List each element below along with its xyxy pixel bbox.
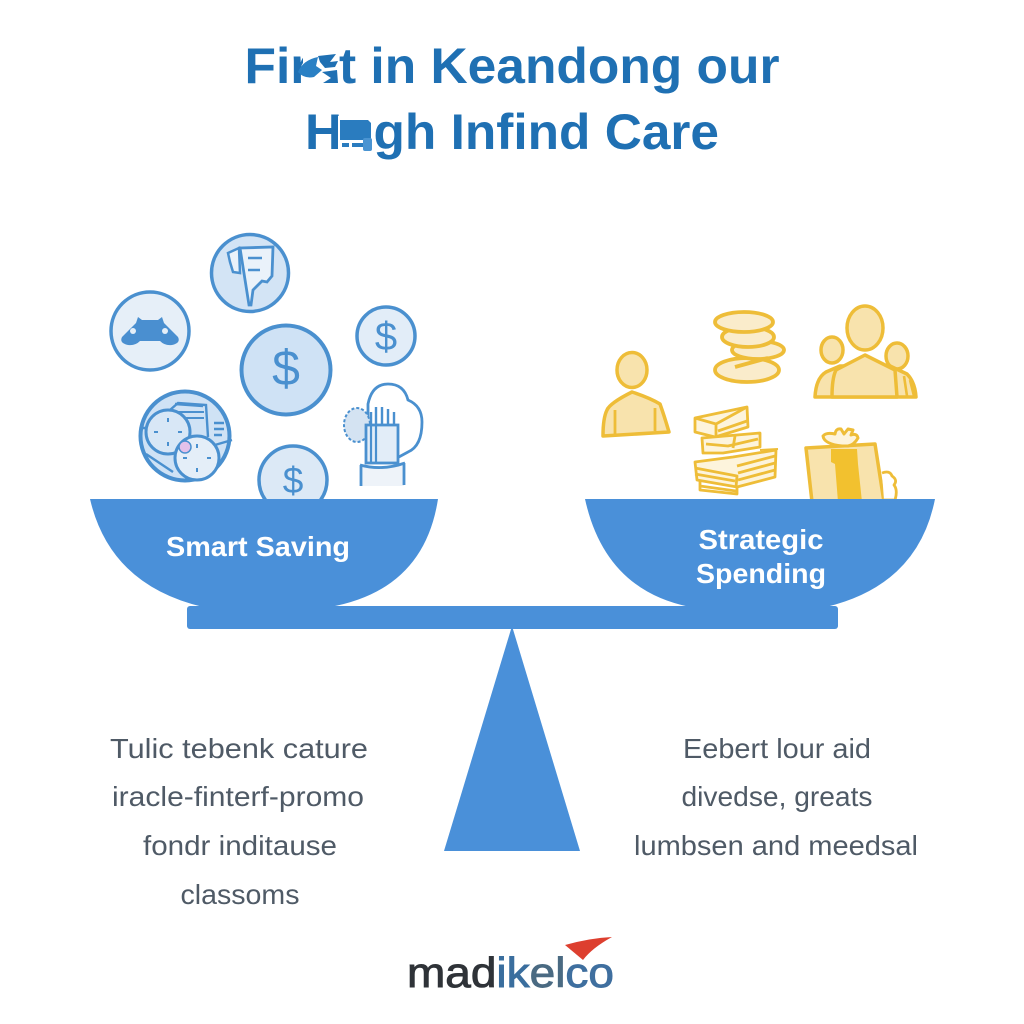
icon: bottom dollar coin <box>257 444 329 499</box>
text block: right description <box>634 733 918 861</box>
icon: car <box>111 292 189 370</box>
bowl label: smart saving: Smart Saving <box>166 531 350 562</box>
text block: left description: iracle-finterf-promo <box>112 781 364 812</box>
text block: left description: Tulic tebenk cature <box>110 733 368 764</box>
balance beam <box>187 606 838 629</box>
icon: document <box>212 234 288 312</box>
icon: single person <box>603 352 669 436</box>
icon: stacked books of money <box>695 407 778 494</box>
panel: strategic spending icons <box>603 306 916 502</box>
icon: gift box <box>806 429 896 502</box>
icon: large dollar coin <box>242 326 330 414</box>
icon: small dollar coin <box>357 307 415 365</box>
bowl label: strategic spending: Spending <box>696 558 826 589</box>
icon: group of people <box>815 306 916 397</box>
title <box>244 38 780 160</box>
text block: left description: classoms <box>180 879 300 910</box>
logo mark: red swoosh <box>565 937 612 960</box>
text block: right description: Eebert lour aid <box>683 733 871 764</box>
text block: right description: lumbsen and meedsal <box>634 830 918 861</box>
title icon: smudge second line <box>338 116 372 151</box>
panel: smart saving icons <box>111 234 422 514</box>
icon: large dollar coin: $ <box>272 340 300 396</box>
title icon: smudge first line <box>298 50 339 86</box>
title: First in Keandong our <box>244 38 780 94</box>
icon: small dollar coin: $ <box>375 315 397 359</box>
bowl label: strategic spending <box>696 524 826 589</box>
bowl label: strategic spending: Strategic <box>698 524 824 555</box>
text block: left description <box>110 733 368 910</box>
title: Hngh Infind Care <box>305 104 719 160</box>
right bowl <box>585 499 935 607</box>
icon: clocks <box>140 392 232 480</box>
balance fulcrum <box>444 626 580 851</box>
logo: madikelco <box>407 949 614 996</box>
left bowl <box>90 499 438 607</box>
text block: right description: divedse, greats <box>682 781 872 812</box>
icon: bottom dollar coin: $ <box>283 460 303 501</box>
icon: cloud with pencils <box>344 384 422 486</box>
icon: coin stack <box>715 312 784 382</box>
text block: left description: fondr inditause <box>143 830 337 861</box>
